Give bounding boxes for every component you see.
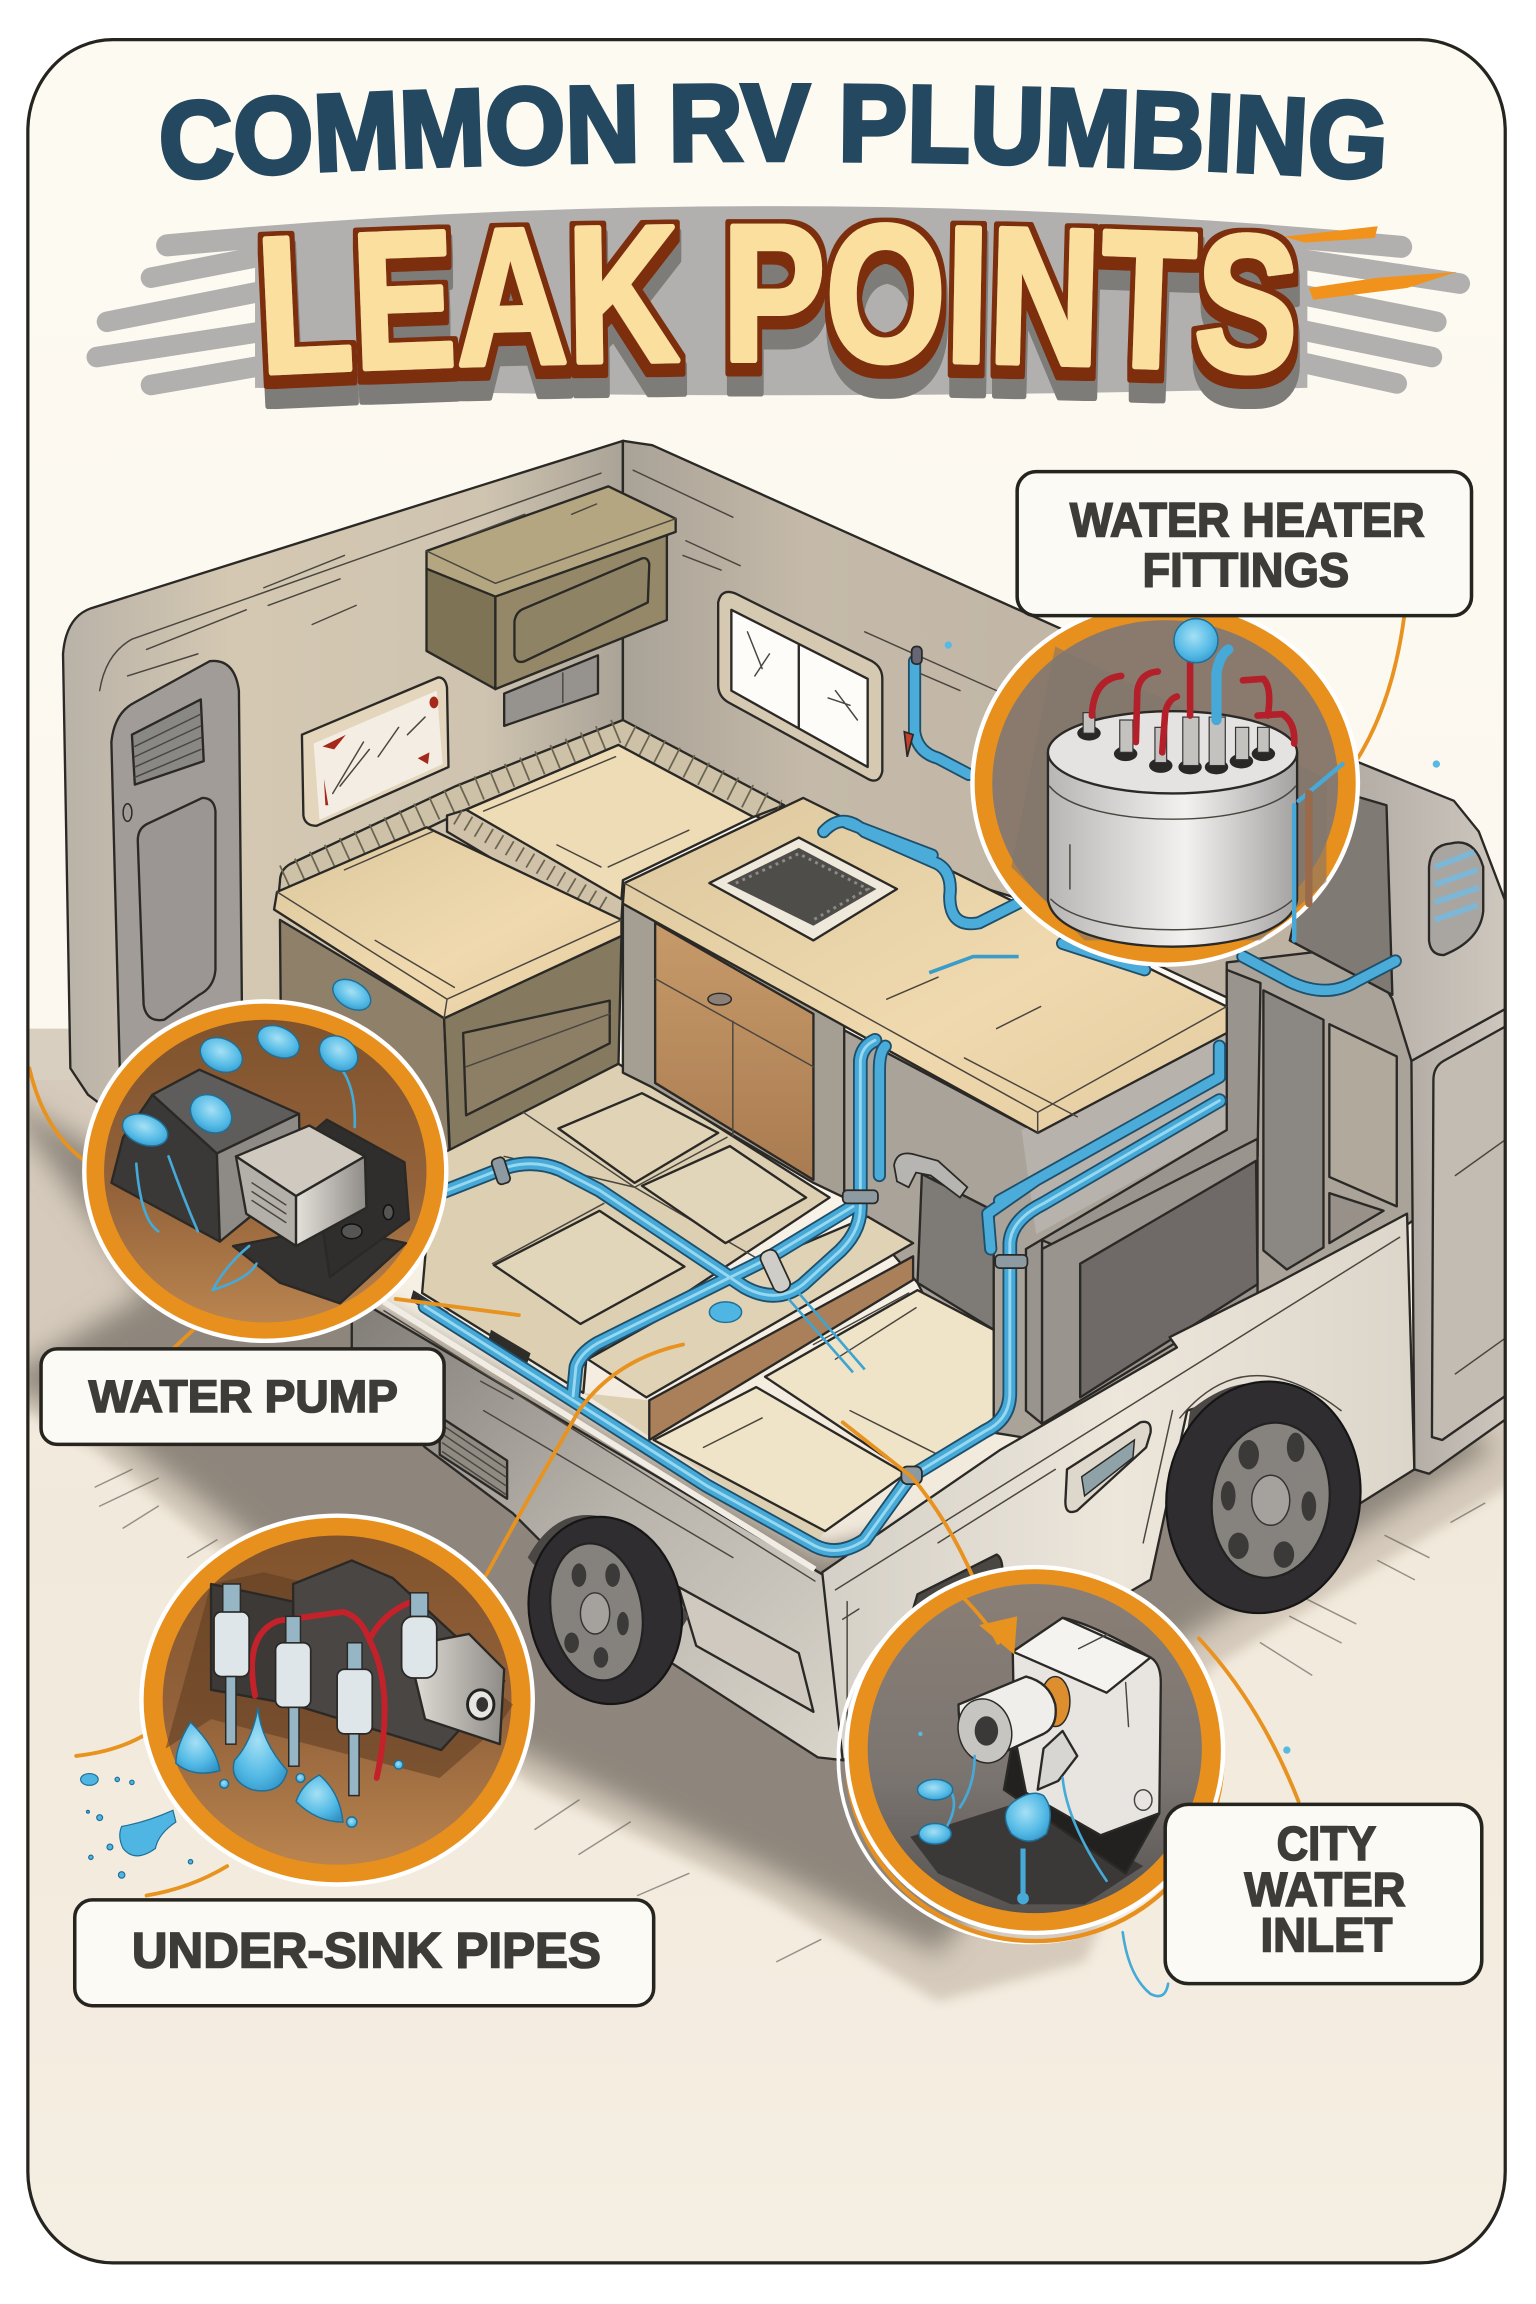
magnifier: water heater — [970, 600, 1360, 967]
inlet leaks — [917, 1756, 1107, 1904]
heater tank — [1048, 711, 1297, 947]
rv: kitchen countertop — [623, 798, 1227, 1133]
title: leak points: LEAK POINTS — [258, 218, 1300, 410]
magnifier: city water inlet — [838, 1565, 1225, 1943]
ground shadow — [0, 1029, 1524, 2001]
small drops — [918, 641, 1440, 1754]
label: city water inlet: INLET — [1260, 1908, 1393, 1962]
rv: rear countertop — [466, 745, 753, 899]
title streaks — [97, 217, 1460, 392]
rv: right interior wall — [622, 440, 1308, 998]
label: water pump — [41, 1349, 444, 1444]
rv: rear side panel — [352, 1290, 844, 1760]
drop above pump — [327, 973, 376, 1017]
heater hoses and leak — [1092, 619, 1343, 940]
title accents: orange flames — [1284, 226, 1457, 300]
inlet arrow — [960, 1594, 1017, 1655]
rv: wall outlet — [504, 655, 598, 726]
pump leaks — [118, 1019, 365, 1290]
inlet housing — [951, 1618, 1161, 1873]
magnifier: water pump — [82, 999, 448, 1343]
magnifier: under-sink pipes — [139, 1513, 535, 1887]
label: water heater fittings: WATER HEATER — [1070, 493, 1425, 547]
rv: wall door with vent — [111, 661, 243, 1084]
rv: upper cabinet — [427, 486, 676, 689]
under-sink red hoses — [252, 1600, 416, 1778]
label: city water inlet: CITY — [1277, 1817, 1376, 1871]
rv: wall panel with red marks — [302, 677, 448, 826]
under-sink filters — [214, 1584, 437, 1796]
under-sink machinery — [166, 1560, 513, 1778]
rv: front wheel — [1165, 1380, 1362, 1614]
rv: cab door panel — [1411, 1007, 1510, 1474]
label: water heater fittings — [1017, 472, 1472, 616]
rv: pipe fittings and valve — [491, 647, 1027, 1484]
label: water heater fittings: FITTINGS — [1142, 543, 1349, 597]
rv: truck side panel — [822, 1214, 1414, 1763]
splashes left of under-sink — [81, 1774, 193, 1878]
rv: kitchen cabinet — [623, 899, 844, 1198]
rv: step and platforms — [588, 1217, 994, 1531]
ground sketch marks — [95, 1469, 1485, 1962]
rv: cab upper shell — [1290, 761, 1510, 1061]
rv: left cabinet — [274, 827, 621, 1161]
label: under-sink pipes: UNDER-SINK PIPES — [132, 1922, 601, 1979]
rv: compartment interior — [813, 940, 1414, 1447]
under-sink leaks — [176, 1707, 403, 1827]
rv: tiled backsplash — [278, 720, 784, 923]
label: water pump: WATER PUMP — [89, 1371, 398, 1422]
heater fittings — [1077, 713, 1275, 774]
title: common rv plumbing: COMMON RV PLUMBING — [161, 83, 1384, 180]
rv: rear wheel — [527, 1515, 689, 1706]
label: city water inlet — [1165, 1804, 1482, 1984]
rv: floor tiles — [422, 1064, 830, 1546]
rv: left interior wall — [62, 440, 624, 1103]
label: city water inlet: WATER — [1244, 1863, 1406, 1917]
rv: blue plumbing lines — [425, 661, 1395, 1550]
rv: window — [718, 592, 882, 781]
leader lines — [29, 617, 1404, 1996]
label: under-sink pipes — [75, 1900, 654, 2006]
pump unit — [111, 1070, 409, 1303]
